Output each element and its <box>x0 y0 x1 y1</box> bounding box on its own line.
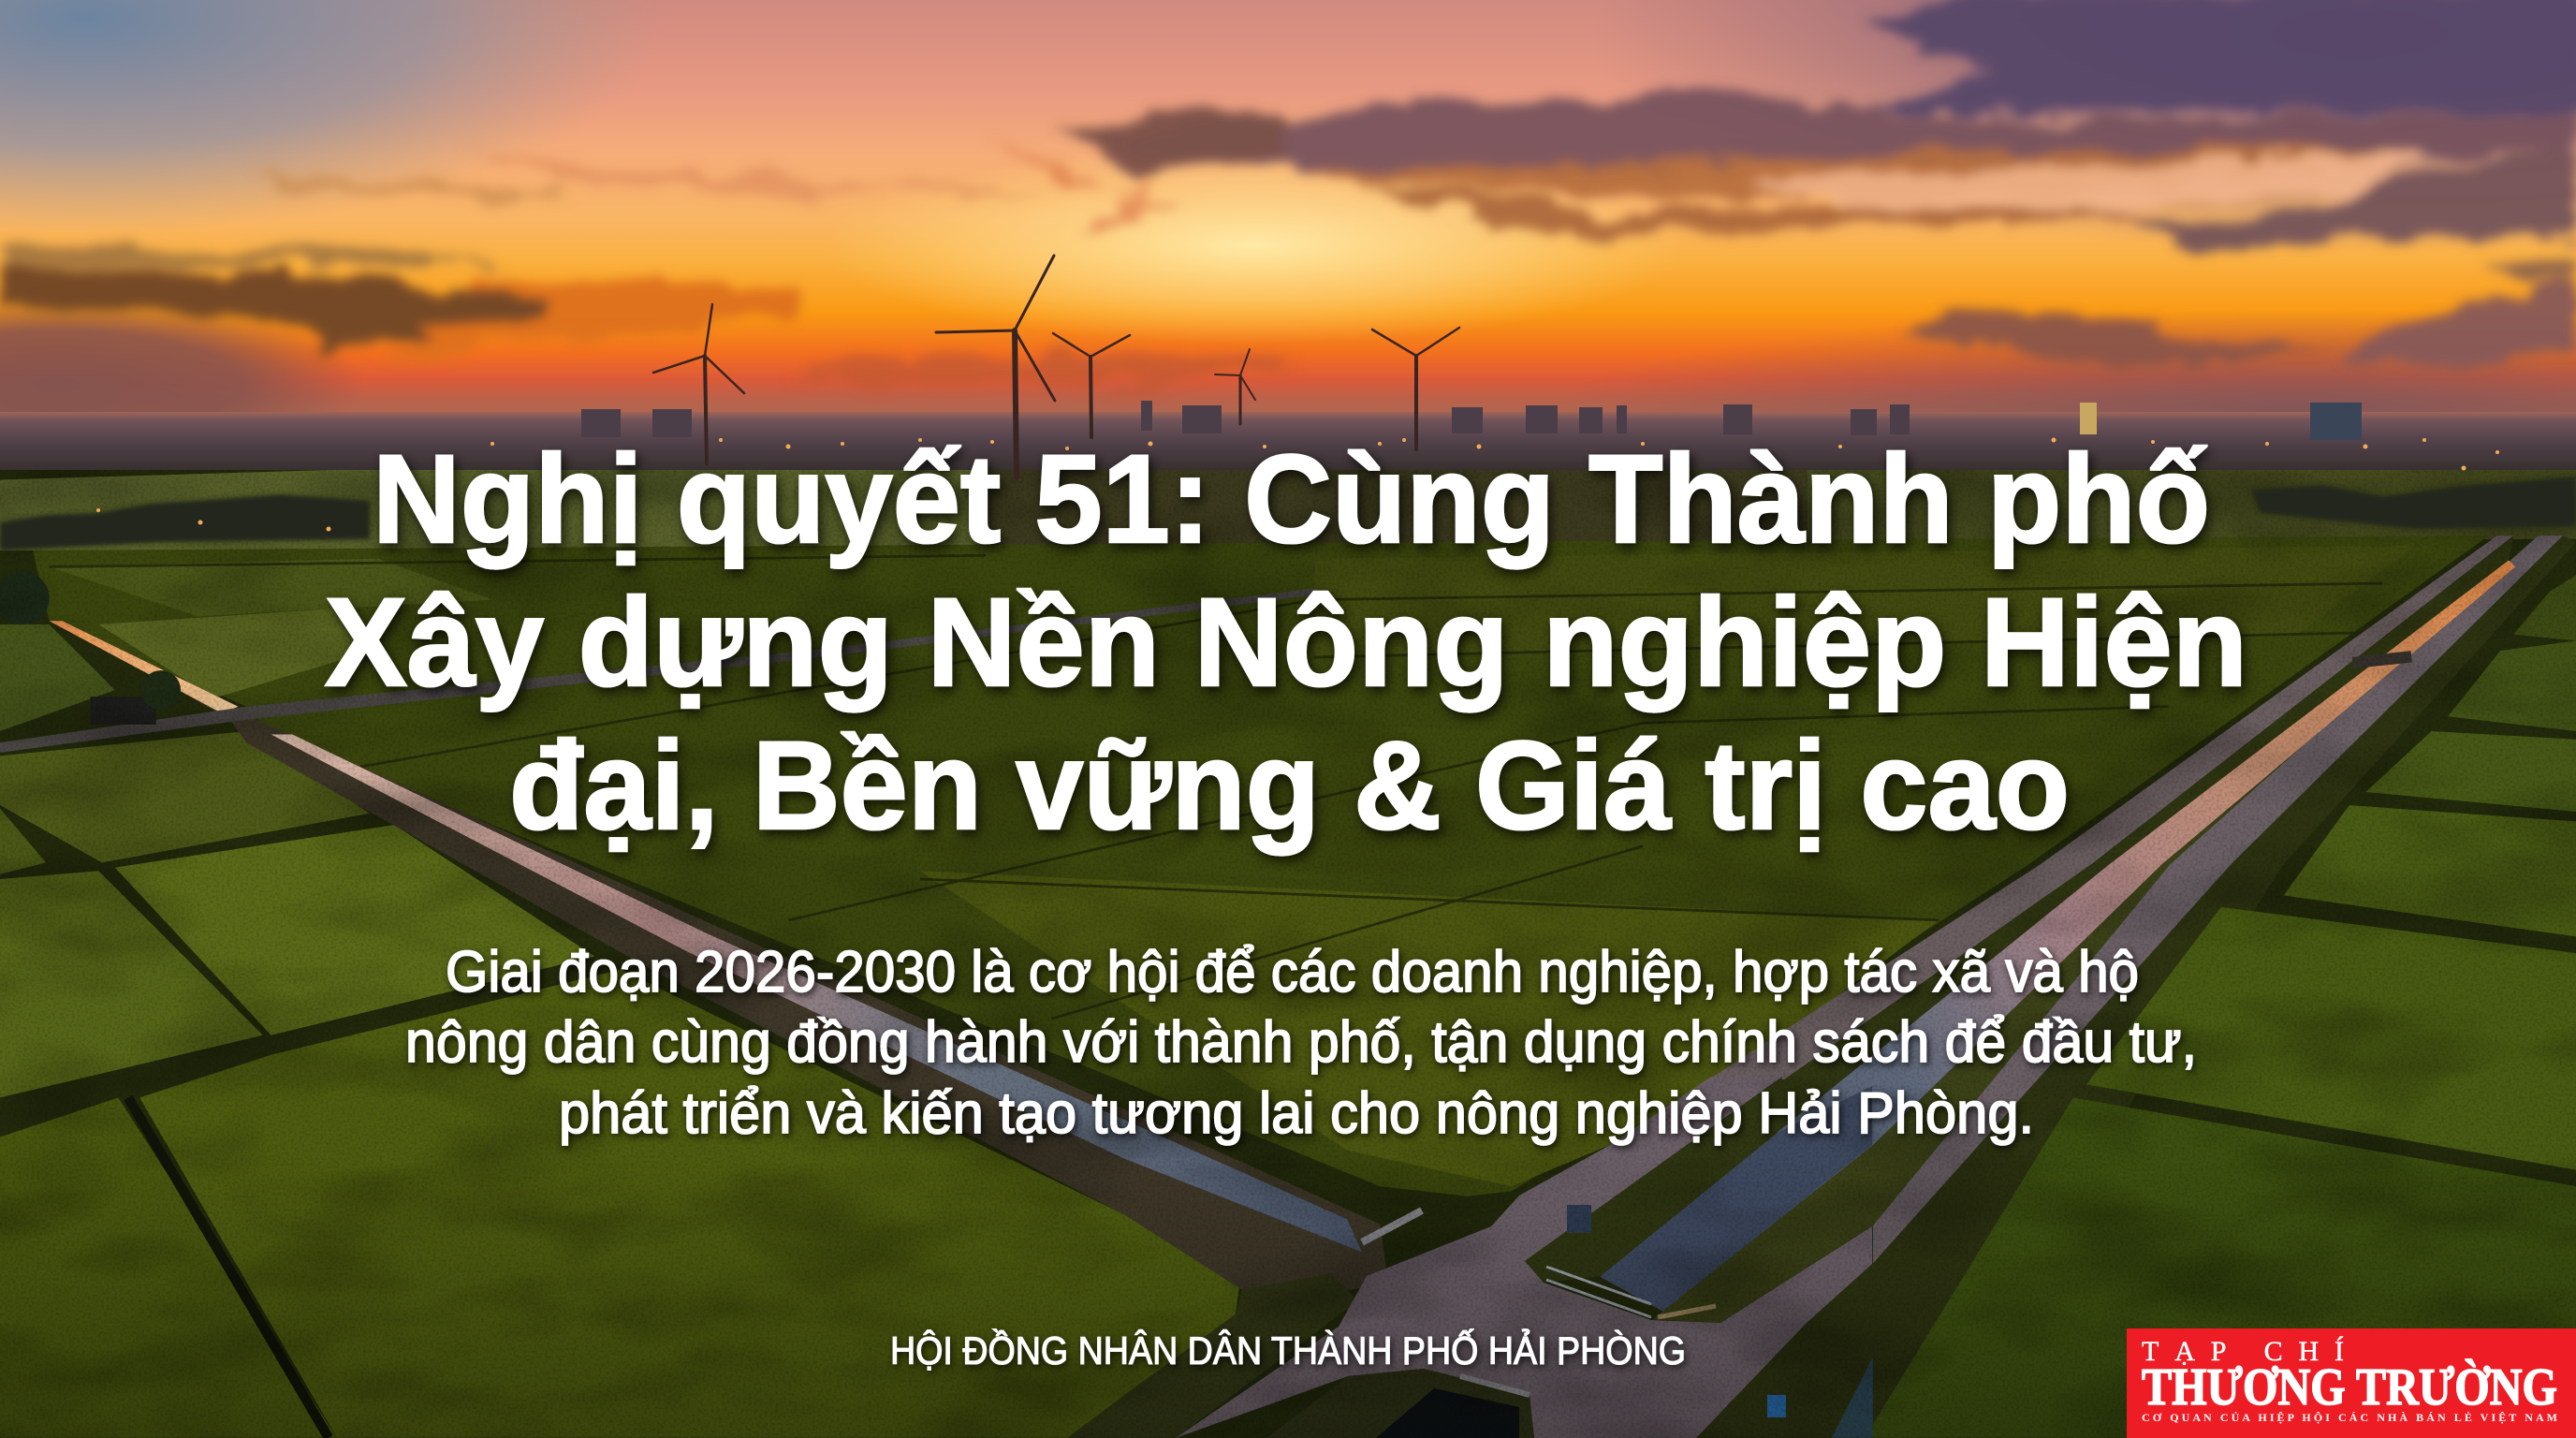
right fields <box>1832 575 2576 1438</box>
sign post <box>1567 1205 1591 1233</box>
culvert <box>1266 1369 1534 1438</box>
canal fence <box>1546 1267 1651 1317</box>
central field <box>33 536 2489 1196</box>
ground: rice fields, canals and roads <box>0 444 2576 1438</box>
right bank, roads and canal <box>1600 536 2576 1438</box>
road junction <box>1176 1077 1872 1438</box>
city skyline band <box>0 401 2576 550</box>
title: đại, Bền vững & Giá trị cao <box>509 716 2070 856</box>
title: Xây dựng Nền Nông nghiệp Hiện <box>325 573 2247 712</box>
turbine 2 <box>936 256 1055 477</box>
field texture and lower shading <box>0 468 2576 1438</box>
far fields <box>0 468 986 550</box>
left fields <box>0 624 1242 1438</box>
subtitle: nông dân cùng đồng hành với thành phố, tận dụng chính sách để đầu tư, <box>405 1010 2197 1075</box>
logo: Tạp chí Thương Trường <box>2127 1328 2576 1438</box>
turbine 3 <box>1053 333 1130 437</box>
subtitle: Giai đoạn 2026-2030 là cơ hội để các doanh nghiệp, hợp tác xã và hộ <box>446 940 2139 1005</box>
turbine 4 <box>1215 349 1255 424</box>
turbine 5 <box>1372 328 1459 449</box>
turbine 1 <box>653 304 744 463</box>
left canal <box>46 614 1388 1438</box>
title: Nghị quyết 51: Cùng Thành phố <box>373 430 2210 569</box>
bridge rail at left canal <box>1362 1211 1422 1242</box>
source line: HỘI ĐỒNG NHÂN DÂN THÀNH PHỐ HẢI PHÒNG <box>890 1328 1686 1372</box>
subtitle <box>405 940 2197 1146</box>
logo: Tạp chí Thương Trường: CƠ QUAN CỦA HIỆP HỘI CÁC NHÀ BÁN LẺ VIỆT NAM <box>2142 1411 2557 1424</box>
wind turbines <box>653 256 1459 477</box>
cross road left <box>0 588 1318 753</box>
title <box>325 430 2247 856</box>
sky with sunset clouds <box>0 0 2576 515</box>
logo: Tạp chí Thương Trường: TẠP CHÍ <box>2142 1336 2344 1367</box>
subtitle: phát triển và kiến tạo tương lai cho nông nghiệp Hải Phòng. <box>559 1081 2034 1146</box>
